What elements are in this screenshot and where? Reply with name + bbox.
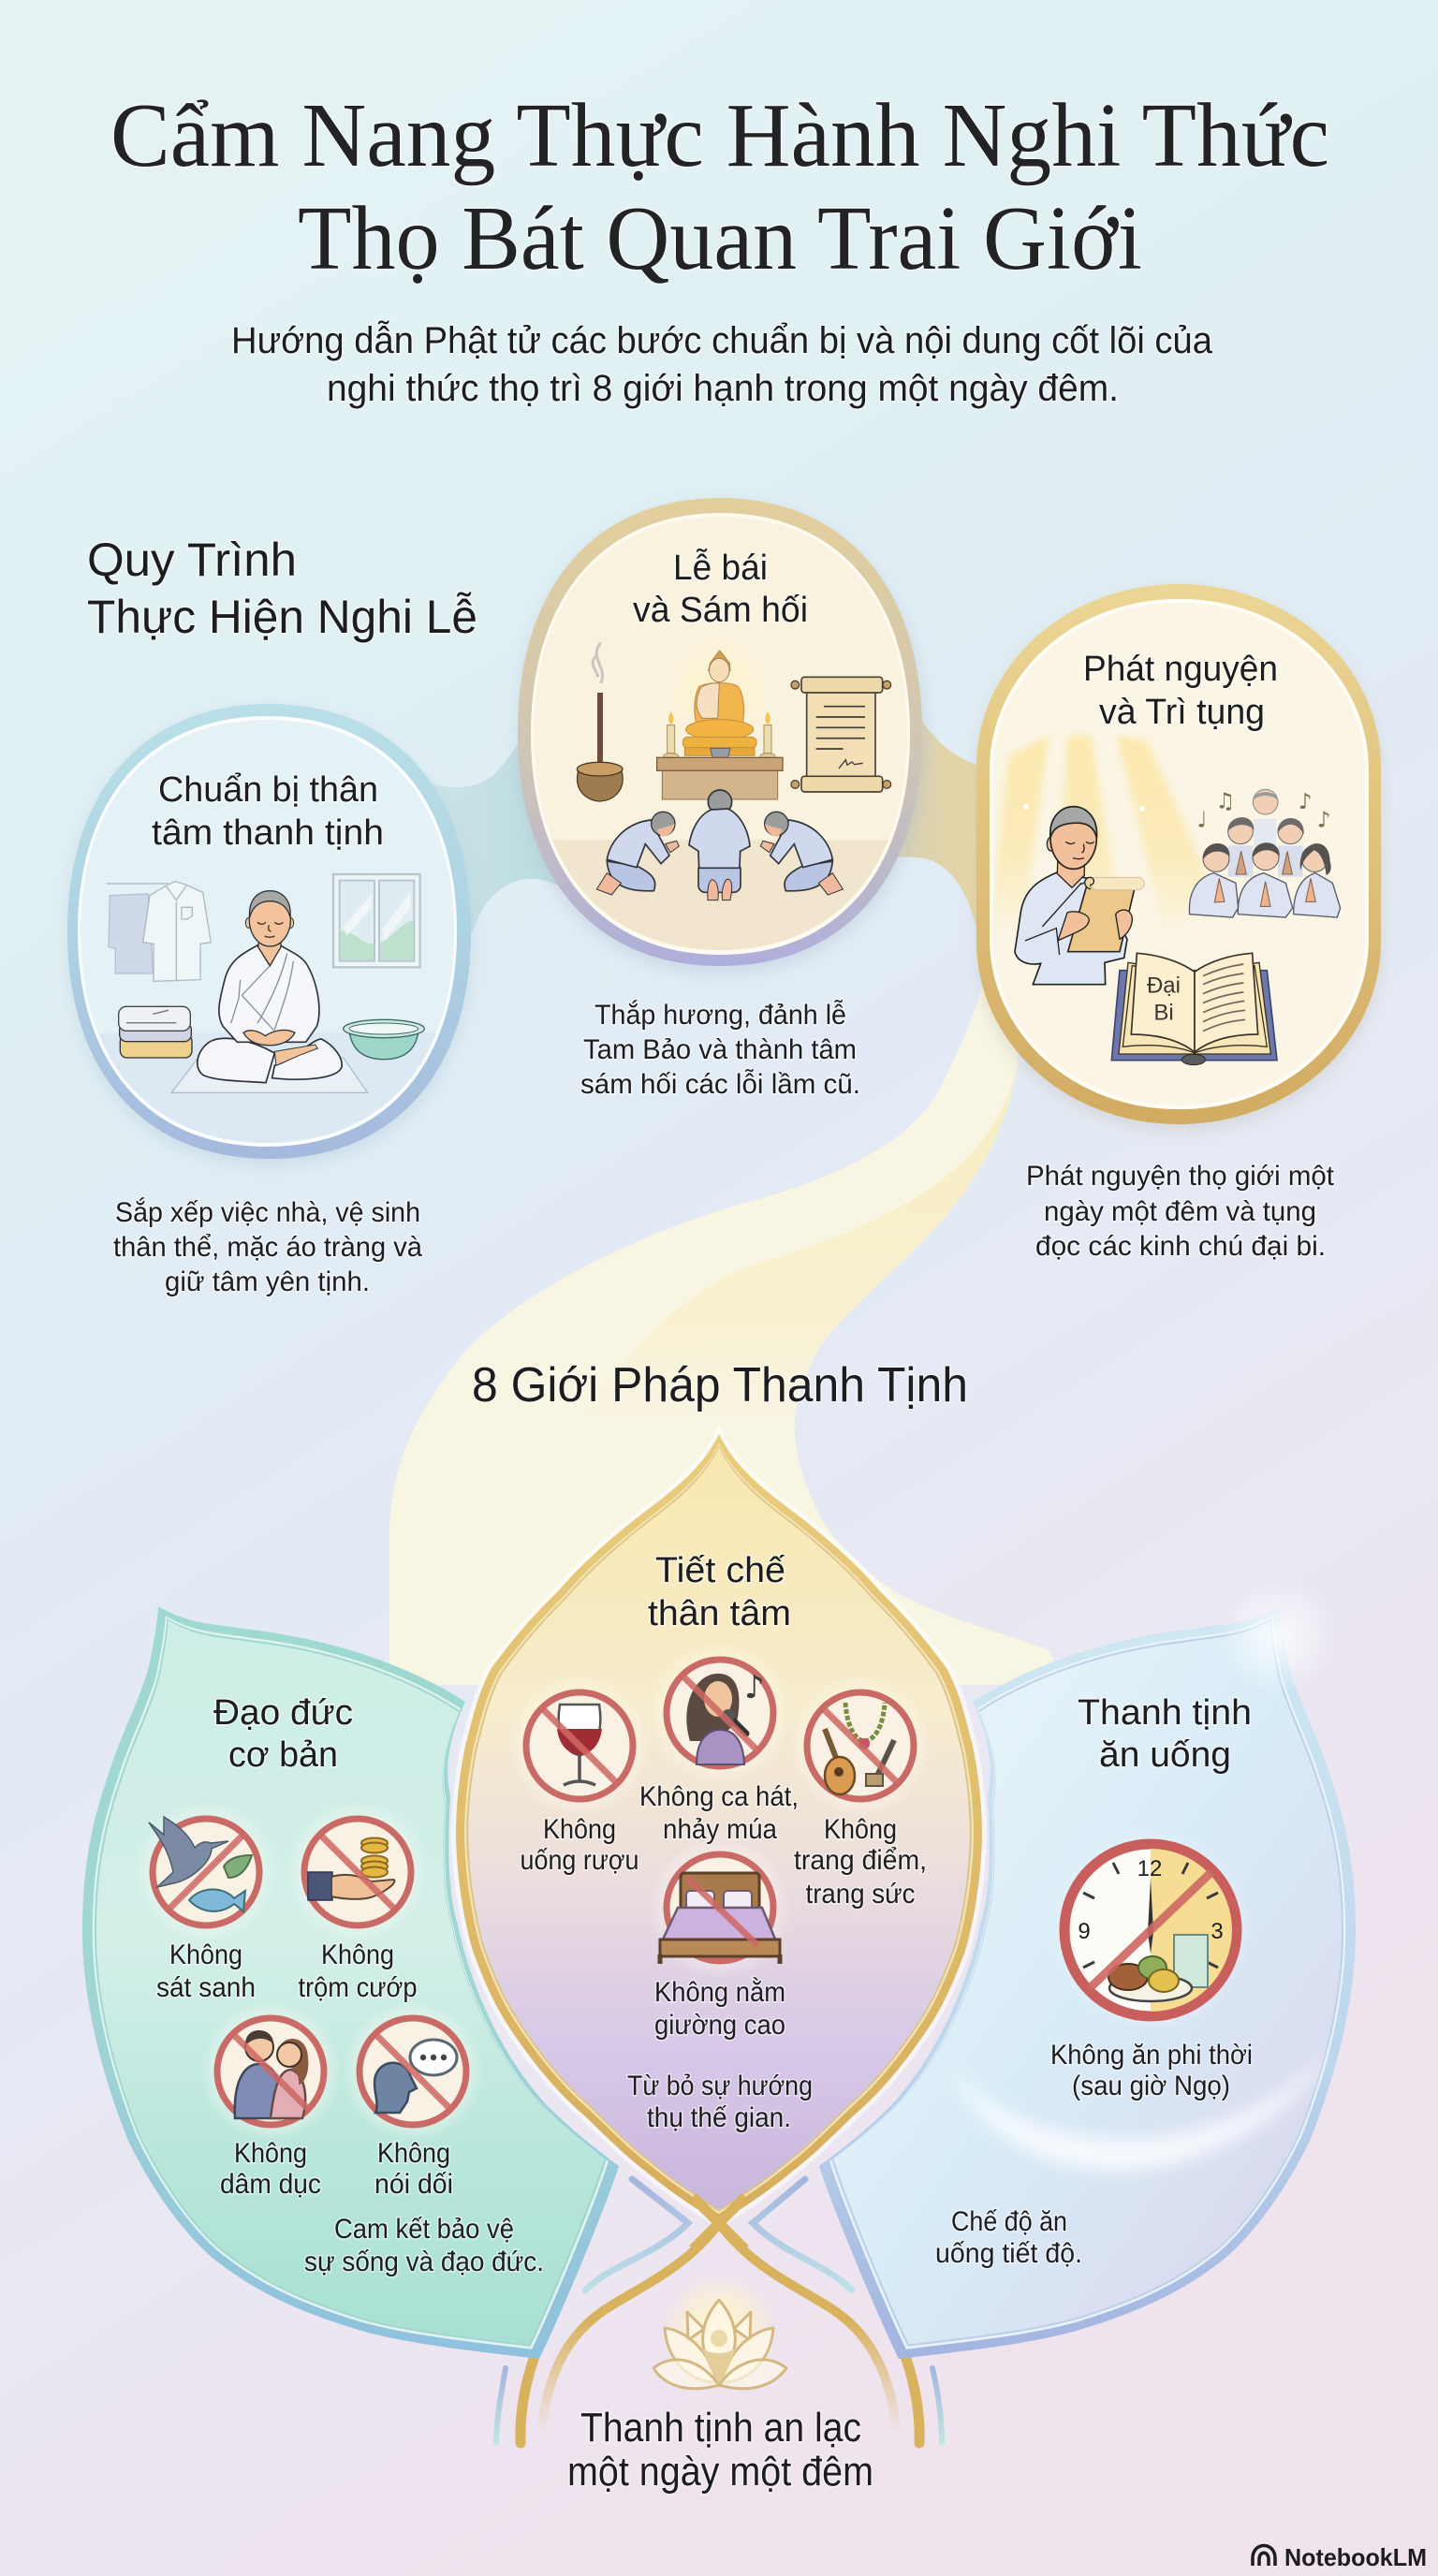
left petal summary: sự sống và đạo đức. (304, 2247, 544, 2277)
centre leaf icon captions: trang sức (805, 1879, 916, 1910)
NotebookLM logo: NotebookLM (1284, 2543, 1427, 2571)
right petal caption (1050, 2040, 1253, 2101)
icon: no singing and dancing: ♪ (744, 1669, 765, 1706)
icon: no adornment or music instruments (789, 1675, 932, 1817)
left petal icon captions: Không (234, 2138, 307, 2169)
flowing ribbon path (389, 973, 1067, 1685)
step 1 panel: prepare body and mind (44, 704, 480, 1166)
left petal icon captions: Không (169, 1939, 242, 1970)
step 3 light rays (993, 732, 1208, 919)
step 2 heading: Lễ bái (673, 548, 768, 588)
icon: no high bed (649, 1837, 791, 1979)
left petal icon captions: Không (377, 2138, 450, 2169)
left petal icon captions: Không (321, 1939, 394, 1970)
centre leaf icon captions: Không nằm (654, 1977, 785, 2008)
centre leaf icon captions: Không (543, 1814, 616, 1845)
right petal summary (935, 2206, 1082, 2269)
section heading: process (87, 534, 477, 643)
left petal heading (213, 1693, 353, 1775)
step 1 description: giữ tâm yên tịnh. (165, 1266, 370, 1297)
panel: basic ethics petal (left) (82, 1606, 619, 2359)
icon: no eating after noon clock: 3 (1211, 1919, 1224, 1944)
step 2 description (580, 1000, 860, 1100)
icon: no eating after noon clock: 12 (1137, 1856, 1162, 1881)
step 3 illustration: reciting monk, chanting group and open book (1015, 787, 1341, 1065)
step 2 description: Thắp hương, đảnh lễ (594, 1000, 846, 1031)
left petal heading: cơ bản (228, 1735, 338, 1775)
icon: no killing (135, 1801, 277, 1943)
step 3 illustration: reciting monk, chanting group and open book: Bi (1153, 1000, 1174, 1025)
step 3 description (1026, 1161, 1335, 1262)
step 3 description: Phát nguyện thọ giới một (1026, 1161, 1335, 1192)
icon: no singing and dancing (649, 1642, 791, 1784)
step 2 description: sám hối các lỗi lầm cũ. (580, 1069, 860, 1100)
centre leaf icon captions: giường cao (654, 2010, 785, 2041)
light swoosh and glow (946, 1578, 1335, 2171)
step 2 description: Tam Bảo và thành tâm (583, 1034, 857, 1065)
centre leaf icon captions (521, 1781, 927, 2041)
subtitle: Hướng dẫn Phật tử các bước chuẩn bị và nội dung cốt lõi của (231, 319, 1213, 361)
icon: no eating after noon clock: 9 (1078, 1919, 1091, 1944)
section heading: 8 precepts: 8 Giới Pháp Thanh Tịnh (472, 1358, 968, 1412)
step 3 illustration: reciting monk, chanting group and open book: ♫ (1215, 787, 1235, 813)
step 3 heading: Phát nguyện (1083, 650, 1278, 689)
step 3 heading (1083, 650, 1278, 732)
ribbon connector between steps 1 and 2 (403, 721, 580, 945)
step 3 illustration: reciting monk, chanting group and open book: ♩ (1196, 806, 1207, 832)
right petal heading: ăn uống (1099, 1735, 1231, 1775)
right petal heading: Thanh tịnh (1078, 1693, 1252, 1733)
section heading: process: Thực Hiện Nghi Lễ (87, 591, 477, 643)
centre leaf summary: Từ bỏ sự hướng (627, 2071, 813, 2101)
centre leaf icon captions: trang điểm, (794, 1845, 927, 1876)
step 3 description: đọc các kinh chú đại bi. (1035, 1231, 1326, 1262)
title: Cẩm Nang Thực Hành Nghi Thức (110, 85, 1329, 186)
centre leaf icon captions: Không (824, 1814, 897, 1845)
subtitle (231, 319, 1213, 409)
right petal summary: uống tiết độ. (935, 2238, 1082, 2269)
icon: no sexual misconduct (199, 2000, 342, 2143)
centre leaf icon captions: nhảy múa (663, 1814, 777, 1845)
subtitle: nghi thức thọ trì 8 giới hạnh trong một ngày đêm. (327, 368, 1119, 409)
icon: no eating after noon clock (1049, 1829, 1252, 2031)
step 1 heading (152, 770, 384, 853)
right petal caption: Không ăn phi thời (1050, 2040, 1253, 2071)
centre leaf heading: thân tâm (648, 1594, 791, 1633)
step 2 heading (633, 548, 808, 630)
ribbon connector between steps 2 and 3 (894, 693, 992, 964)
lotus emblem (653, 2273, 786, 2389)
closing message: một ngày một đêm (567, 2449, 873, 2495)
centre leaf icon captions: uống rượu (521, 1845, 638, 1876)
leaf base crossing (693, 2197, 745, 2249)
step 1 description (113, 1197, 422, 1297)
step 1 illustration: meditating monk with robes, window and basin (98, 872, 436, 1143)
step 2 heading: và Sám hối (633, 591, 808, 630)
icon: no alcohol (508, 1675, 651, 1817)
title: Thọ Bát Quan Trai Giới (298, 188, 1142, 289)
step 3 illustration: reciting monk, chanting group and open book: Đại (1147, 973, 1181, 999)
left petal icon captions: trộm cướp (298, 1972, 418, 2003)
step 3 illustration: reciting monk, chanting group and open book: ♪ (1299, 788, 1313, 814)
icon: no stealing (286, 1801, 429, 1943)
title (110, 85, 1329, 289)
step 1 heading: Chuẩn bị thân (158, 770, 378, 810)
left petal icon captions (156, 1939, 453, 2200)
step 3 illustration: reciting monk, chanting group and open book: ♪ (1317, 806, 1331, 832)
step 1 description: Sắp xếp việc nhà, vệ sinh (115, 1197, 420, 1228)
centre leaf heading: Tiết chế (655, 1551, 785, 1590)
step 1 heading: tâm thanh tịnh (152, 813, 384, 853)
left petal summary: Cam kết bảo vệ (334, 2214, 514, 2245)
centre leaf summary: thụ thế gian. (647, 2102, 791, 2133)
section heading: process: Quy Trình (87, 534, 297, 586)
closing message: Thanh tịnh an lạc (580, 2405, 861, 2451)
right petal summary: Chế độ ăn (951, 2206, 1067, 2237)
panel: restraint of body and mind leaf (centre) (456, 1434, 982, 2249)
left petal icon captions: dâm dục (220, 2169, 321, 2200)
step 3 panel: vows and chanting (976, 584, 1381, 1131)
step 3 description: ngày một đêm và tụng (1044, 1196, 1316, 1227)
step 2 panel: prostration and repentance (518, 498, 967, 973)
left petal icon captions: sát sanh (156, 1972, 256, 2003)
closing message (567, 2405, 873, 2495)
icon: no lying (342, 2000, 484, 2143)
left petal icon captions: nói dối (374, 2169, 453, 2200)
left petal heading: Đạo đức (213, 1693, 353, 1733)
step 1 description: thân thể, mặc áo tràng và (113, 1232, 422, 1263)
centre leaf heading (648, 1551, 791, 1633)
step 3 heading: và Trì tụng (1099, 693, 1265, 732)
centre leaf summary (627, 2071, 813, 2133)
panel: pure diet petal (right) (819, 1578, 1356, 2359)
left petal summary (304, 2214, 544, 2277)
crossing base lines under the lotus petals (496, 2179, 942, 2443)
right petal heading (1078, 1693, 1252, 1775)
centre leaf icon captions: Không ca hát, (639, 1781, 799, 1812)
right petal caption: (sau giờ Ngọ) (1072, 2071, 1230, 2101)
step 2 illustration: altar, incense, scroll and kneeling devotees (552, 642, 891, 950)
